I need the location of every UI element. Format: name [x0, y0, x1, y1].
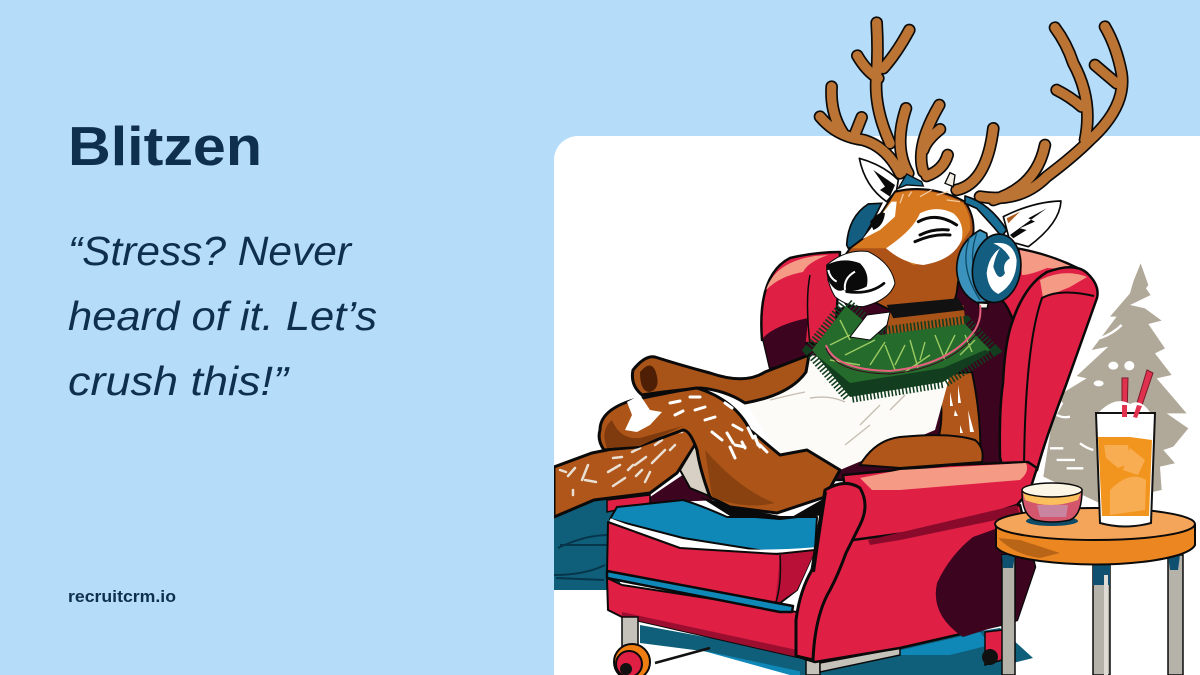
icon: cup — [1022, 483, 1082, 526]
thigh spots — [670, 397, 767, 458]
leg spots — [560, 432, 682, 495]
headband — [965, 196, 1007, 237]
left earcup — [847, 203, 882, 248]
reindeer raised arm and hoof — [632, 355, 809, 403]
chair lower body — [796, 505, 1035, 662]
chair cushion — [607, 500, 817, 657]
reindeer thigh — [599, 388, 840, 520]
reindeer belly fur — [808, 355, 950, 470]
arm roll front — [796, 483, 865, 660]
head — [828, 189, 974, 312]
title: Blitzen — [68, 115, 262, 177]
icon: iced drink glass — [1096, 370, 1155, 526]
quote text — [68, 228, 377, 404]
dark arm crease — [868, 505, 1020, 545]
shaded underside — [936, 520, 1035, 637]
floor rug — [554, 498, 1033, 675]
straws — [1122, 370, 1153, 417]
chair: right wing — [1000, 267, 1098, 480]
closed eye — [915, 217, 957, 242]
collar — [887, 298, 965, 318]
chair: right wing top rail — [1000, 248, 1087, 320]
armchair back — [761, 248, 1098, 480]
eye patch — [886, 209, 962, 265]
quote text: “Stress? Never — [68, 228, 353, 274]
smile — [847, 283, 884, 292]
chair: dark inner back — [762, 284, 1038, 482]
muzzle — [827, 251, 895, 307]
fur hatching — [770, 392, 905, 445]
right earcup — [957, 230, 1025, 308]
chest patch — [850, 312, 890, 340]
pine needles — [830, 320, 975, 372]
chair arm top — [843, 462, 1037, 540]
icon: reindeer head group — [820, 23, 1122, 353]
chair rear seat shadow — [606, 476, 714, 513]
wreath shadow — [815, 350, 990, 397]
pine wreath — [812, 305, 990, 397]
white knee patch — [625, 395, 662, 432]
icon: snowy pine tree — [1043, 263, 1188, 503]
side table legs — [1002, 555, 1183, 675]
brand url: recruitcrm.io — [68, 587, 176, 606]
quote text: crush this!” — [68, 358, 291, 404]
white piping — [610, 520, 815, 551]
reindeer right foreleg — [938, 371, 982, 446]
blue seat cushion — [610, 500, 817, 553]
forehead hatch — [900, 190, 960, 203]
chair front panel and arm — [796, 462, 1037, 662]
wreath body — [812, 306, 990, 395]
white tail tuft — [680, 448, 708, 497]
neck — [883, 305, 970, 353]
quote text: heard of it. Let’s — [68, 293, 377, 339]
hoof shading — [640, 365, 658, 392]
chair leg and wheel front left — [614, 617, 650, 675]
left eye patch — [863, 202, 897, 239]
lower front rail — [607, 578, 797, 657]
chair: left wing — [761, 252, 840, 345]
chair leg and wheel rear right — [806, 630, 1003, 675]
headphone cord — [826, 305, 980, 371]
side table top — [995, 508, 1195, 564]
wreath fringe — [812, 306, 990, 395]
nose — [826, 260, 867, 291]
pink arm highlight — [860, 463, 1027, 490]
red front of cushion — [607, 522, 815, 607]
antlers — [820, 23, 1122, 200]
ears — [859, 158, 1061, 247]
forehead orange tone — [852, 191, 970, 265]
reindeer lower crossed leg — [554, 428, 698, 517]
blue trim strip — [607, 571, 793, 612]
illustration: relaxed reindeer scene — [554, 23, 1195, 675]
panel: white illustration card — [554, 136, 1200, 675]
reindeer arm on chair — [860, 435, 983, 468]
